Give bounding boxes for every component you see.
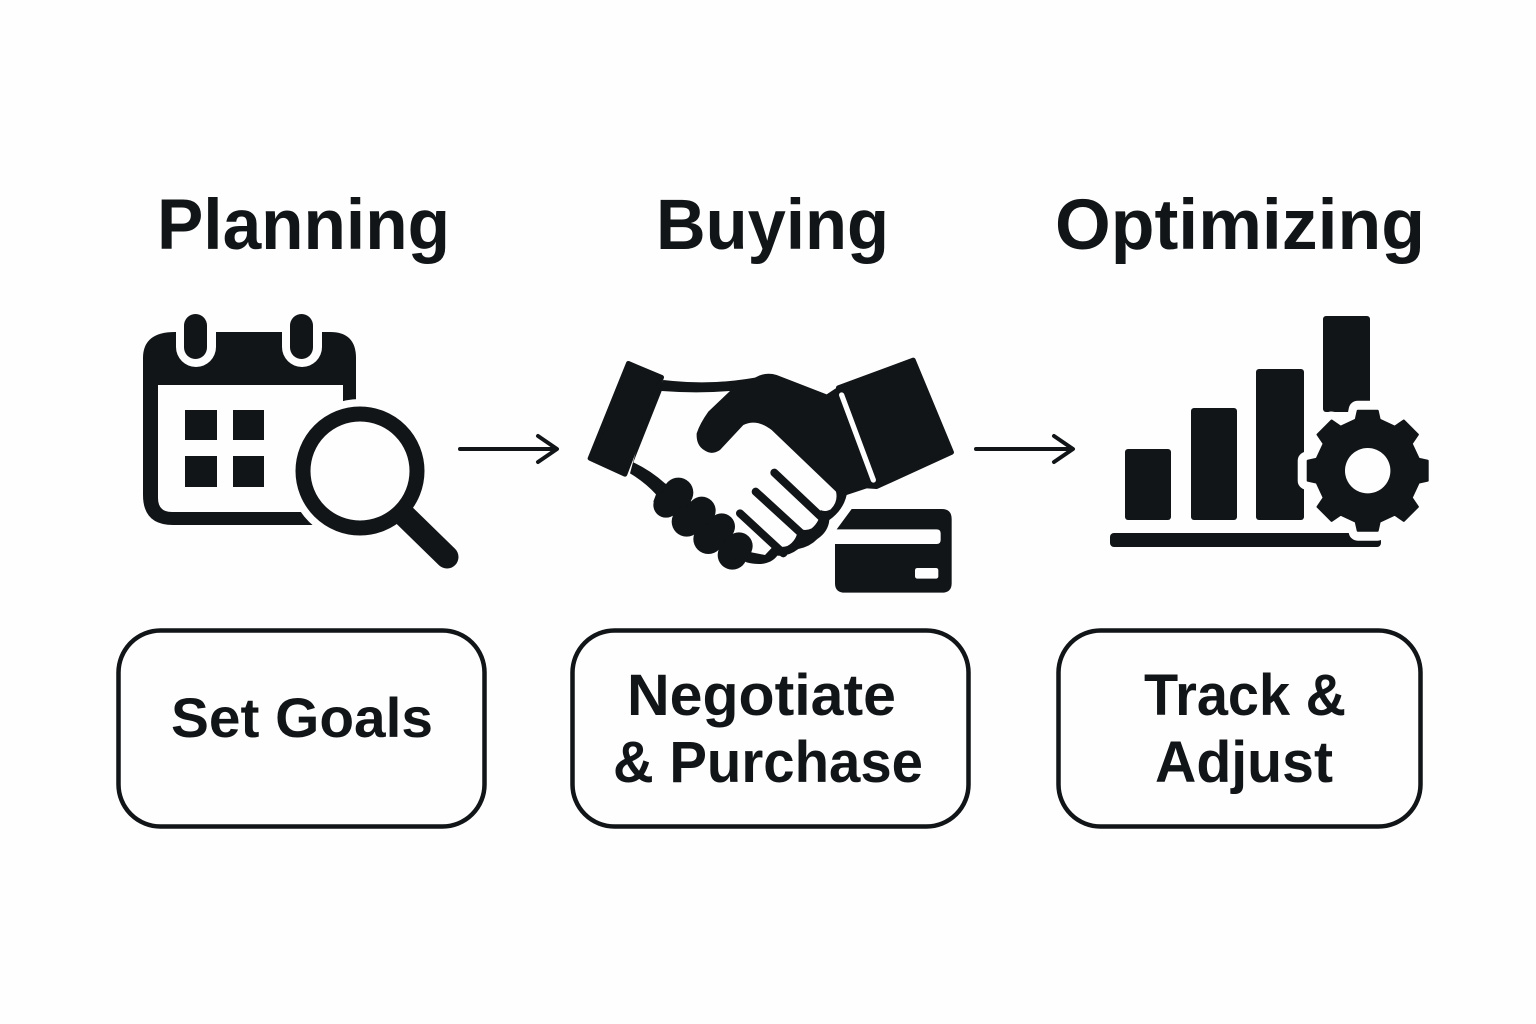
calendar date squares [185, 410, 264, 487]
credit card [835, 509, 952, 593]
gear [1307, 410, 1429, 532]
panel: optimizing column [1055, 186, 1429, 826]
right cuff [838, 360, 952, 487]
heading: Optimizing: Optimizing [1055, 186, 1425, 265]
panel: planning column [118, 186, 484, 826]
panel: buying column [572, 186, 968, 826]
step box: Track & Adjust: Adjust [1155, 730, 1333, 795]
beaded fingers [653, 478, 753, 570]
step box: Negotiate & Purchase: Negotiate [627, 663, 896, 728]
heading: Planning: Planning [157, 186, 450, 265]
icon: bar chart with gear [1110, 316, 1429, 547]
calendar body [143, 332, 356, 525]
calendar ring: left [176, 310, 216, 367]
heading: Buying: Buying [656, 186, 889, 265]
calendar ring: right [282, 310, 322, 367]
step box: Set Goals [118, 630, 484, 826]
arrow: buying to optimizing [976, 436, 1073, 462]
cuff stripe [842, 395, 873, 480]
step box: Negotiate & Purchase: & Purchase [613, 730, 923, 795]
step box: Negotiate & Purchase [572, 630, 968, 826]
finger lines [740, 473, 823, 553]
step box: Set Goals: Set Goals [171, 686, 433, 749]
magnifying glass [288, 399, 447, 557]
open hand [633, 391, 837, 555]
arrow: planning to buying [460, 436, 557, 462]
icon: calendar with magnifying glass [143, 310, 447, 557]
left cuff [590, 363, 662, 474]
step box: Track & Adjust: Track & [1144, 663, 1346, 728]
icon: handshake with credit card [590, 360, 952, 593]
bar chart [1110, 316, 1381, 547]
handshake silhouette [630, 374, 877, 564]
step box: Track & Adjust [1058, 630, 1420, 826]
